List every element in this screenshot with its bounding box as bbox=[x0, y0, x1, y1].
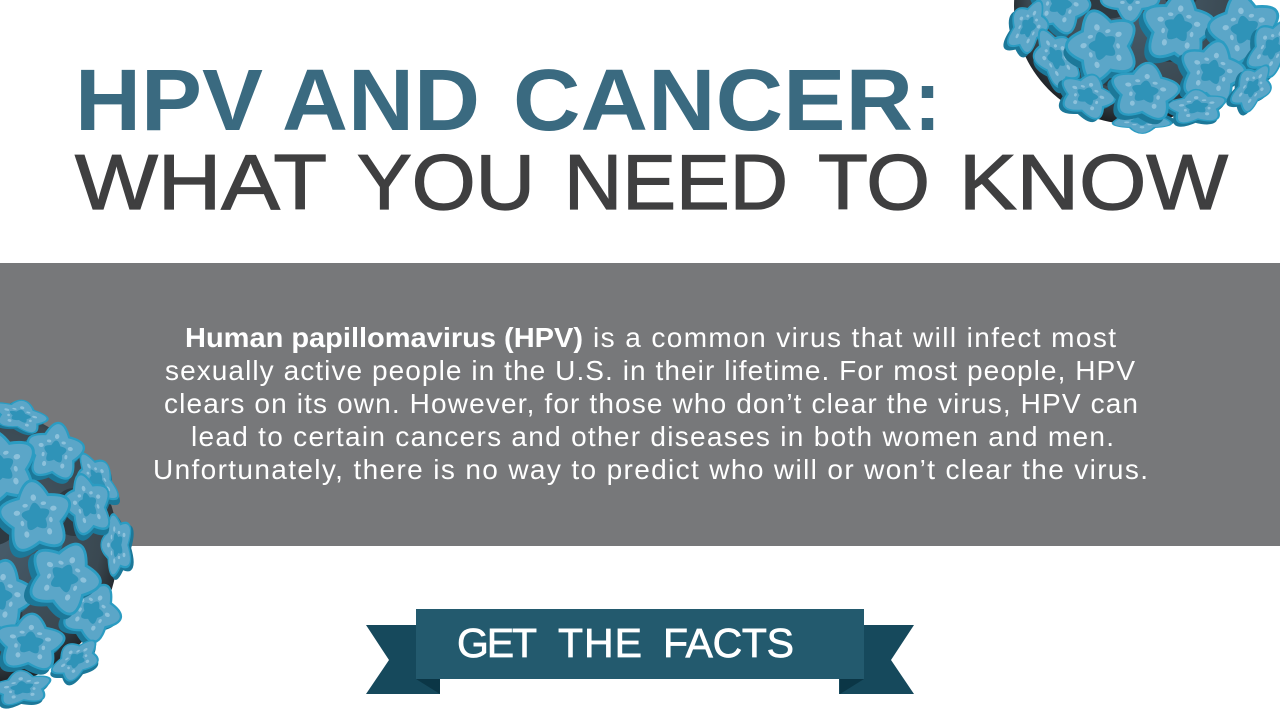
intro text block bbox=[153, 322, 1148, 485]
intro text block: is a common virus that will infect most bbox=[593, 322, 1116, 353]
intro text block: Human papillomavirus (HPV) bbox=[185, 322, 583, 353]
title line: HPV and Cancer: : bbox=[914, 52, 941, 149]
title line: What you need to know: WHAT bbox=[75, 138, 327, 226]
ribbon tail right bbox=[839, 625, 914, 694]
title line: What you need to know: YOU bbox=[357, 138, 535, 226]
intro text block: Unfortunately, there is no way to predict who will or won’t clear the virus. bbox=[153, 454, 1148, 485]
title line: What you need to know: NEED bbox=[564, 138, 788, 226]
panel: grey intro band bbox=[0, 263, 1280, 546]
intro text block: clears on its own. However, for those who don’t clear the virus, HPV can bbox=[164, 388, 1138, 419]
ribbon main bbox=[416, 609, 864, 679]
intro text block: lead to certain cancers and other diseases in both women and men. bbox=[191, 421, 1114, 452]
title line: HPV and Cancer bbox=[75, 52, 941, 149]
title line: What you need to know bbox=[75, 138, 1228, 226]
title line: What you need to know: TO bbox=[818, 138, 930, 226]
icon: HPV virus particle, top right bbox=[999, 0, 1280, 133]
title line: HPV and Cancer: AND bbox=[282, 52, 480, 149]
banner label bbox=[457, 620, 794, 666]
ribbon folds bbox=[416, 679, 864, 694]
ribbon tail left bbox=[366, 625, 440, 694]
intro text block: sexually active people in the U.S. in their lifetime. For most people, HPV bbox=[165, 355, 1135, 386]
icon: HPV virus particle, bottom left bbox=[0, 394, 132, 709]
title line: HPV and Cancer: HPV bbox=[75, 52, 263, 149]
title bbox=[75, 52, 1228, 226]
title line: HPV and Cancer: CANCER bbox=[513, 52, 913, 149]
banner label: GET bbox=[457, 620, 537, 666]
banner: get the facts bbox=[366, 609, 914, 694]
banner label: FACTS bbox=[663, 620, 794, 666]
title line: What you need to know: KNOW bbox=[959, 138, 1228, 226]
banner label: THE bbox=[558, 620, 642, 666]
